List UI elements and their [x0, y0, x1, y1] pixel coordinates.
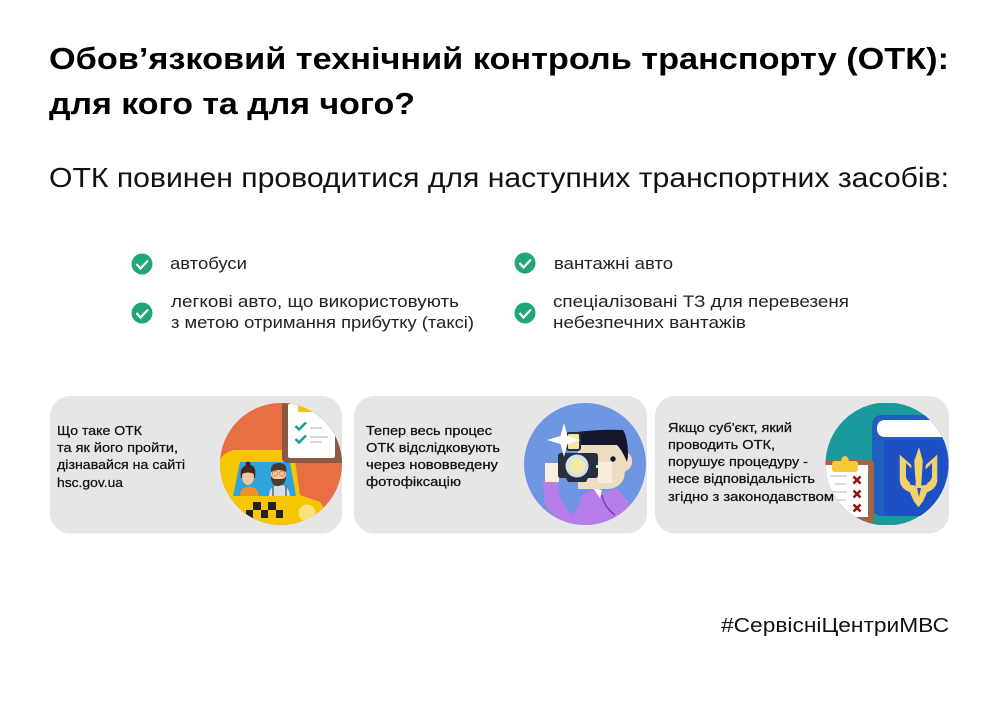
panel text: Тепер весь процес: [366, 423, 493, 438]
trident: [900, 448, 937, 507]
icon: photographer with camera: [524, 403, 646, 527]
headlight: [298, 504, 316, 522]
hands: [545, 463, 559, 482]
checklist of vehicles: [132, 252, 849, 332]
panel text: через нововведену: [366, 457, 499, 472]
panel text: порушує процедуру -: [668, 454, 808, 469]
panel text: згідно з законодавством: [668, 489, 834, 504]
camera: [558, 453, 598, 482]
title: [49, 41, 949, 121]
panel text: Що таке ОТК: [57, 423, 142, 438]
clipboard: [282, 403, 342, 463]
hashtag: #СервісніЦентриМВС: [721, 615, 949, 637]
text: taxis: [171, 292, 474, 332]
icon: check, taxis: [132, 302, 152, 324]
panel text: проводить ОТК,: [668, 437, 775, 452]
panel text: [366, 423, 500, 489]
taxi checkers: [246, 502, 283, 518]
icon: law book with trident and checklist: [822, 403, 952, 525]
panel: what is OTK: [50, 396, 348, 534]
panel text: Якщо суб'єкт, який: [668, 420, 792, 435]
panel: responsibility: [655, 396, 952, 534]
window: [233, 462, 296, 496]
panel text: та як його пройти,: [57, 440, 178, 455]
panel text: [668, 420, 834, 504]
text: taxis: з метою отримання прибутку (таксі): [171, 313, 474, 332]
icon: taxi with passengers and checklist: [220, 403, 342, 525]
sweater: [542, 480, 629, 527]
text: buses: автобуси: [170, 254, 247, 273]
hair: [577, 430, 628, 462]
face: [578, 442, 626, 489]
car body: [220, 450, 324, 525]
text: taxis: легкові авто, що використовують: [171, 292, 459, 311]
title: для кого та для чого?: [49, 86, 415, 121]
panel text: [57, 423, 185, 490]
text: dangerous goods: спеціалізовані ТЗ для перевезеня: [553, 292, 849, 311]
text: dangerous goods: [553, 292, 849, 332]
icon: check, dangerous goods: [514, 302, 536, 324]
icon: check, trucks: [514, 252, 536, 274]
text: trucks: вантажні авто: [554, 254, 673, 273]
panel text: hsc.gov.ua: [57, 475, 124, 490]
title: Обов’язковий технічний контроль транспорту (ОТК):: [49, 41, 949, 76]
icon: check, buses: [132, 254, 152, 274]
text: dangerous goods: небезпечних вантажів: [553, 313, 746, 332]
subtitle: ОТК повинен проводитися для наступних транспортних засобів:: [49, 162, 949, 193]
panel text: несе відповідальність: [668, 471, 815, 486]
man: [269, 463, 290, 496]
panel text: дізнавайся на сайті: [57, 457, 185, 472]
panel text: фотофіксацію: [366, 474, 461, 489]
clipboard: [822, 460, 874, 524]
flash: [567, 433, 580, 450]
panel text: ОТК відслідковують: [366, 440, 500, 455]
book: [872, 415, 950, 516]
woman: [240, 462, 259, 496]
panel: photo recording: [354, 396, 647, 534]
